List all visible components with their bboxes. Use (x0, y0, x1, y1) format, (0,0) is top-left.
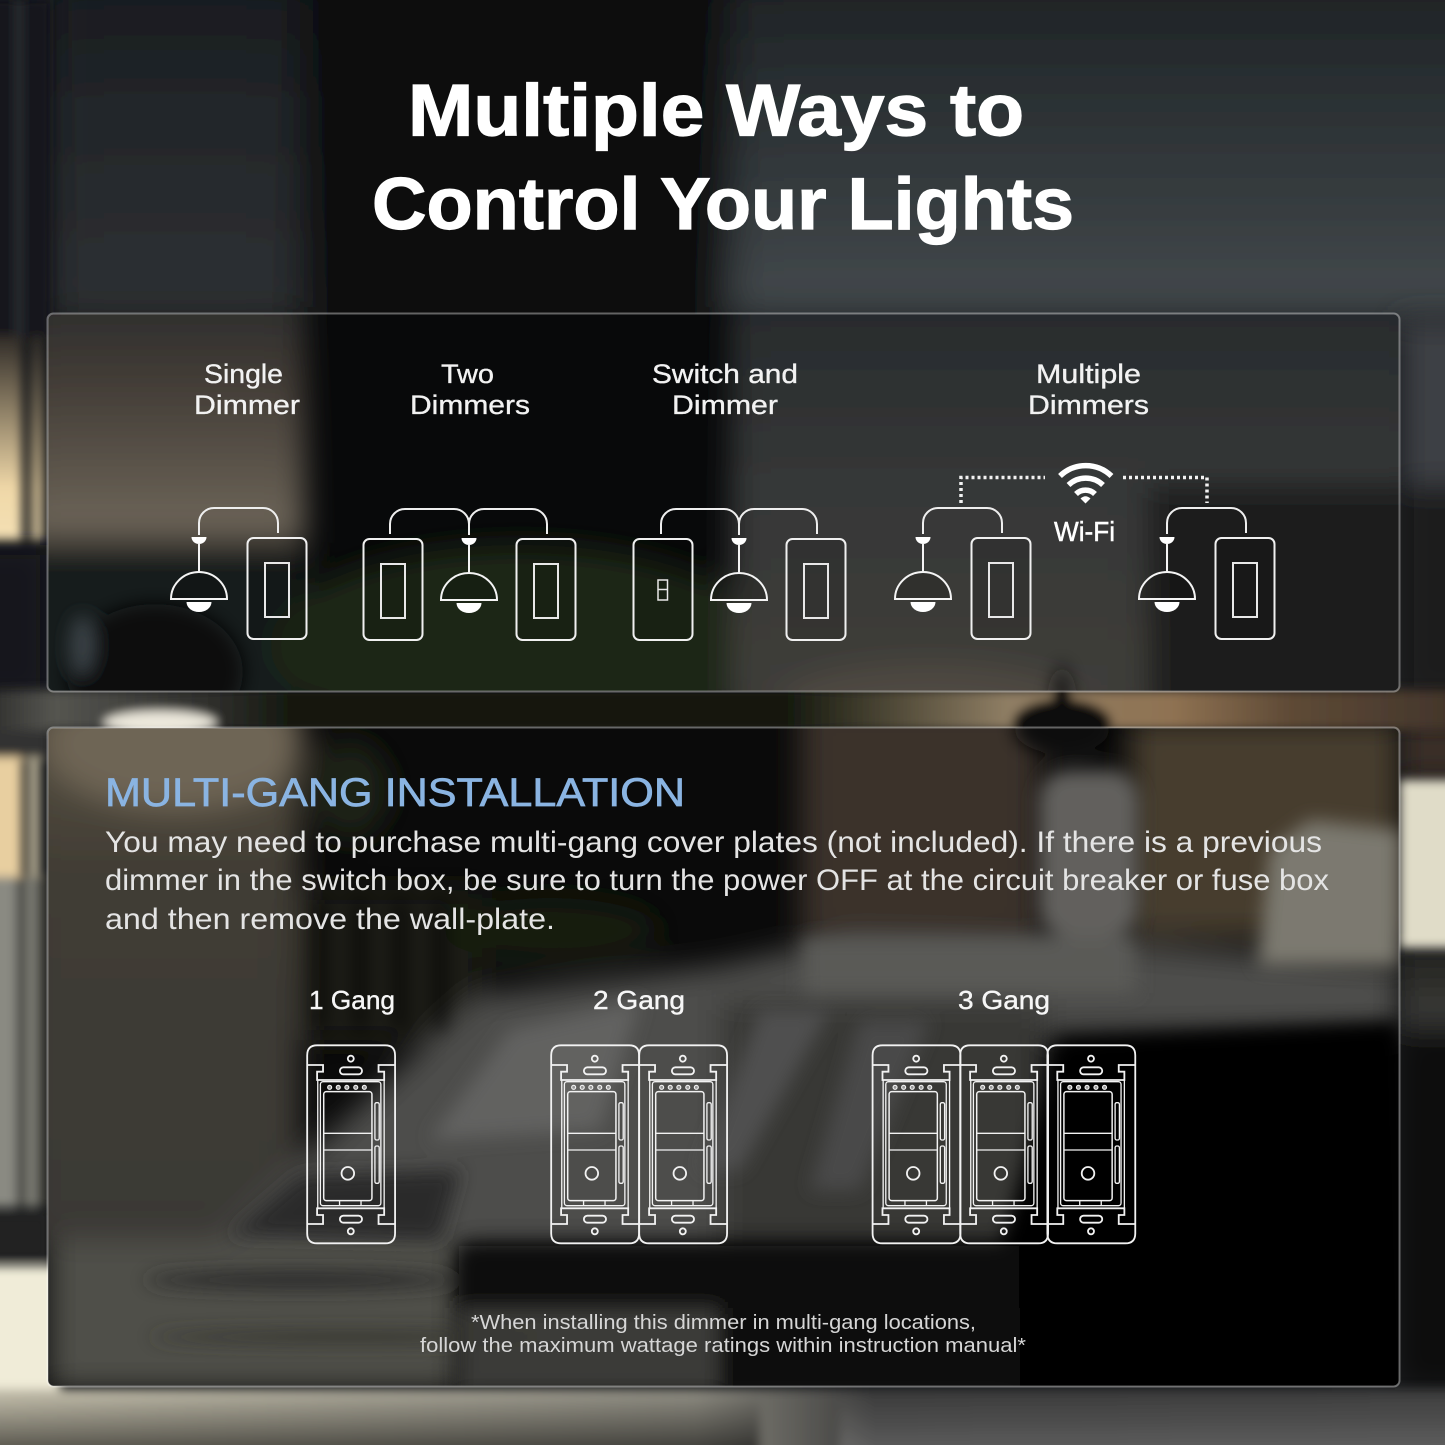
label: two dimmers: Two (441, 359, 494, 389)
footnote: follow the maximum wattage ratings within instruction manual* (420, 1334, 1026, 1357)
diagram: switch and dimmer (634, 509, 846, 640)
label: multiple dimmers: Multiple (1036, 359, 1141, 389)
label: multiple dimmers: Dimmers (1028, 390, 1149, 420)
background inside top panel (48, 314, 1399, 691)
label: switch and dimmer: Switch and (652, 359, 798, 389)
panel: ways to control (48, 314, 1400, 692)
title: Control Your Lights (372, 164, 1074, 245)
title (372, 70, 1074, 245)
diagram: two dimmers (364, 509, 576, 640)
label: switch and dimmer (652, 359, 798, 420)
footnote: *When installing this dimmer in multi-gang locations, (471, 1311, 976, 1334)
body text: and then remove the wall-plate. (105, 903, 555, 936)
label: single dimmer (194, 359, 300, 420)
footnote (420, 1311, 1026, 1357)
title: Multiple Ways to (408, 70, 1024, 152)
label: switch and dimmer: Dimmer (672, 390, 778, 420)
gang labels: 3 Gang (958, 985, 1050, 1015)
diagram: 2 gang (551, 1045, 727, 1243)
gang labels (309, 985, 1050, 1015)
heading: MULTI-GANG INSTALLATION (105, 771, 685, 815)
label: wi-fi: Wi-Fi (1054, 516, 1115, 547)
body text: You may need to purchase multi-gang cover plates (not included). If there is a previous (105, 826, 1322, 859)
gang labels: 1 Gang (309, 985, 395, 1015)
body text: dimmer in the switch box, be sure to turn the power OFF at the circuit breaker or fuse box (105, 864, 1329, 897)
label: two dimmers (410, 359, 530, 420)
label: single dimmer: Dimmer (194, 390, 300, 420)
panel: multi-gang installation (48, 728, 1400, 1386)
diagram: multiple dimmers with wi-fi (895, 466, 1274, 639)
label: two dimmers: Dimmers (410, 390, 530, 420)
diagram: single dimmer (171, 508, 306, 639)
label: single dimmer: Single (204, 359, 283, 389)
diagram: 1 gang (307, 1045, 395, 1243)
gang labels: 2 Gang (593, 985, 685, 1015)
label: multiple dimmers (1028, 359, 1149, 420)
diagram: 3 gang (873, 1045, 1135, 1243)
icon: wi-fi (1060, 466, 1112, 504)
background inside bottom panel (48, 728, 1399, 1386)
body text (105, 826, 1329, 936)
